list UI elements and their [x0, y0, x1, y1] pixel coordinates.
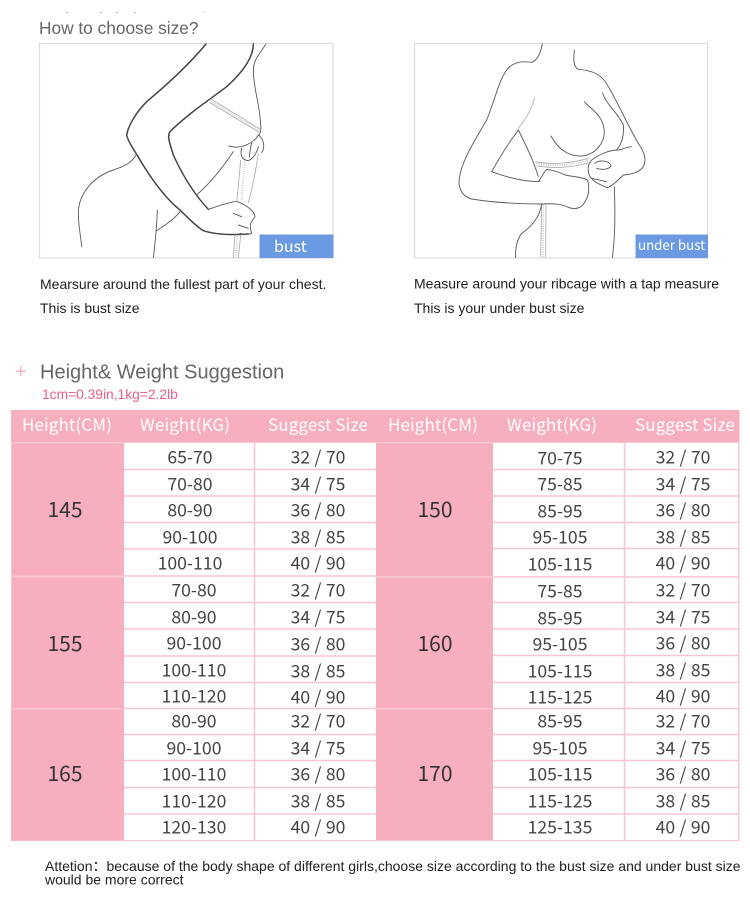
- weight values, right: 125-135: [528, 814, 592, 840]
- weight values, left: 80-90: [171, 604, 217, 630]
- suggested sizes, left: 34 / 75: [291, 736, 345, 760]
- weight values, left: 70-80: [171, 578, 217, 602]
- suggested sizes, right: 36 / 80: [656, 762, 710, 786]
- weight values, right: 70-75: [537, 446, 583, 470]
- weight values, right: 105-115: [528, 762, 592, 786]
- label: under bust: under bust: [638, 235, 705, 254]
- label: bust: bust: [274, 233, 307, 257]
- suggested sizes, left: 38 / 85: [291, 788, 345, 814]
- suggested sizes, right: [656, 444, 710, 840]
- note: attention: [44, 858, 741, 888]
- weight values, left: 120-130: [162, 814, 226, 840]
- weight values, left: 100-110: [162, 762, 226, 786]
- table header: Height(CM): [22, 411, 112, 436]
- weight values, left: 90-100: [163, 524, 217, 550]
- height values: 150: [418, 494, 452, 524]
- weight values, left: 70-80: [167, 472, 213, 496]
- suggested sizes, right: 34 / 75: [656, 736, 710, 760]
- weight values, right: 105-115: [528, 552, 592, 576]
- text: under bust instructions: [414, 276, 719, 316]
- suggested sizes, left: 40 / 90: [291, 684, 345, 710]
- weight values, right: 85-95: [537, 606, 583, 630]
- weight values, right: 115-125: [528, 788, 592, 814]
- weight values, right: 75-85: [537, 472, 583, 496]
- label: bust: [260, 233, 334, 258]
- suggested sizes, left: 38 / 85: [291, 524, 345, 550]
- height values: 165: [48, 758, 82, 788]
- weight values, right: 95-105: [533, 632, 587, 656]
- weight values, left: 90-100: [167, 630, 221, 656]
- weight values, right: 105-115: [528, 658, 592, 684]
- table header: Weight(KG): [507, 411, 597, 436]
- weight values, right: 85-95: [537, 708, 583, 734]
- suggested sizes, left: 34 / 75: [291, 472, 345, 496]
- text: bust instructions: Mearsure around the fullest part of your chest.: [40, 276, 326, 292]
- suggested sizes, right: 32 / 70: [656, 444, 710, 470]
- height column cells: [11, 410, 740, 840]
- suggested sizes, left: 40 / 90: [291, 550, 345, 576]
- weight values, right: 85-95: [537, 498, 583, 524]
- suggested sizes, right: 36 / 80: [656, 498, 710, 522]
- table header: [22, 411, 735, 436]
- suggested sizes, left: 38 / 85: [291, 658, 345, 684]
- height values: 160: [418, 628, 452, 658]
- suggested sizes, right: 34 / 75: [656, 472, 710, 496]
- weight values, right: 115-125: [528, 684, 592, 710]
- suggested sizes, left: 32 / 70: [291, 444, 345, 470]
- weight values, left: 100-110: [158, 550, 222, 576]
- suggested sizes, left: 36 / 80: [291, 762, 345, 786]
- suggested sizes, right: 40 / 90: [656, 814, 710, 840]
- suggested sizes, left: 36 / 80: [291, 632, 345, 656]
- weight values, left: 65-70: [167, 444, 213, 470]
- weight values, left: 100-110: [162, 658, 226, 682]
- weight values, left: 80-90: [171, 708, 217, 734]
- suggested sizes, left: [291, 444, 345, 840]
- title: how to choose size: How to choose size?: [39, 18, 198, 38]
- text: bust instructions: This is bust size: [40, 300, 140, 316]
- suggested sizes, left: 32 / 70: [291, 708, 345, 734]
- suggested sizes, right: 38 / 85: [656, 658, 710, 682]
- weight values, right: 95-105: [533, 524, 587, 550]
- note: attention: would be more correct: [44, 872, 184, 888]
- note: attention: Attetion：because of the body shape of different girls,choose size according to the bust size and under bust size: [45, 858, 741, 874]
- suggested sizes, right: 40 / 90: [656, 550, 710, 576]
- icon: front view figure measuring under bust: [459, 44, 645, 258]
- icon: side view figure measuring bust: [78, 44, 266, 258]
- height values: 155: [48, 628, 82, 658]
- weight values, left: 90-100: [167, 736, 221, 760]
- height values: [48, 494, 452, 788]
- table header: Height(CM): [388, 411, 478, 436]
- suggested sizes, left: 36 / 80: [291, 498, 345, 522]
- suggested sizes, left: 32 / 70: [291, 578, 345, 602]
- panel: bust illustration: [40, 44, 334, 258]
- weight values, left: 80-90: [167, 498, 213, 522]
- heading: height and weight suggestion: Height& Weight Suggestion: [40, 362, 284, 384]
- text: unit conversion: 1cm=0.39in,1kg=2.2lb: [42, 387, 178, 402]
- weight values, left: 110-120: [162, 788, 226, 814]
- weight values, left: [158, 444, 226, 840]
- suggested sizes, right: 38 / 85: [656, 524, 710, 550]
- suggested sizes, right: 36 / 80: [656, 630, 710, 656]
- suggested sizes, right: 40 / 90: [656, 684, 710, 708]
- suggested sizes, left: 40 / 90: [291, 814, 345, 840]
- text: under bust instructions: This is your under bust size: [414, 300, 585, 316]
- suggested sizes, right: 38 / 85: [656, 788, 710, 814]
- height values: 170: [418, 758, 452, 788]
- weight values, right: [528, 446, 592, 840]
- suggested sizes, left: 34 / 75: [291, 604, 345, 630]
- weight values, right: 95-105: [533, 736, 587, 760]
- table: size chart: [11, 410, 740, 841]
- table header: Suggest Size: [268, 411, 368, 436]
- height values: 145: [48, 494, 82, 524]
- table header: Suggest Size: [635, 411, 735, 436]
- suggested sizes, right: 32 / 70: [656, 708, 710, 734]
- weight values, left: 110-120: [162, 684, 226, 708]
- suggested sizes, right: 34 / 75: [656, 604, 710, 630]
- weight values, right: 75-85: [537, 578, 583, 604]
- suggested sizes, right: 32 / 70: [656, 578, 710, 602]
- icon: plus: +: [15, 361, 27, 383]
- text: under bust instructions: Measure around your ribcage with a tap measure: [414, 276, 719, 292]
- text: bust instructions: [40, 276, 326, 316]
- panel: under bust illustration: [414, 44, 708, 258]
- table header: Weight(KG): [140, 411, 230, 436]
